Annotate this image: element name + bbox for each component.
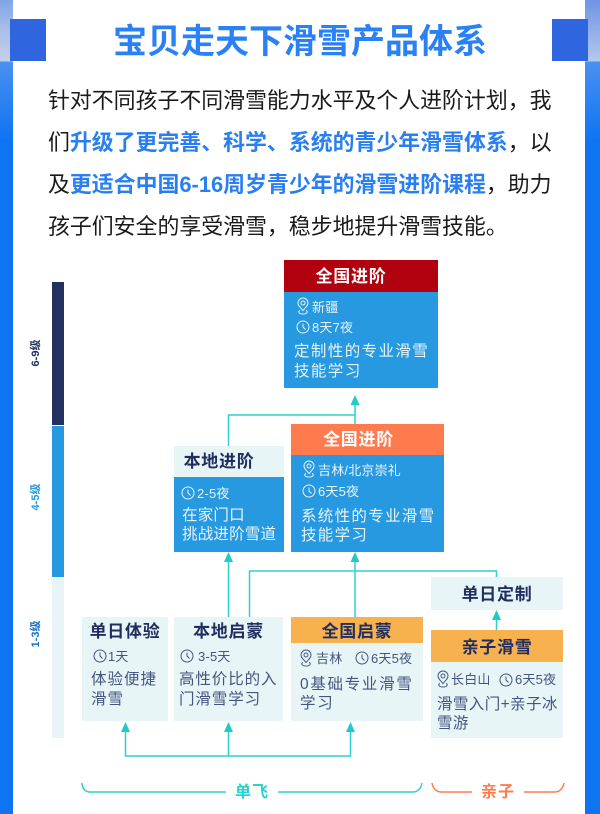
level bar: 6-9 — [52, 282, 64, 425]
description: 系统性的专业滑雪 — [301, 508, 435, 525]
description: 挑战进阶雪道 — [182, 526, 276, 543]
panel: top national advanced — [284, 260, 438, 388]
description: 门滑雪学习 — [179, 690, 261, 708]
header: 本地进阶: 本地进阶 — [184, 452, 254, 471]
header: 单日体验: 单日体验 — [90, 622, 160, 641]
duration: 3-5天 — [198, 649, 231, 664]
level label 4-5: 4-5级 — [30, 484, 42, 510]
intro text: 及更适合中国6-16周岁青少年的滑雪进阶课程，助力 — [48, 172, 552, 197]
header: 全国进阶: 全国进阶 — [316, 267, 386, 286]
level bar: 4-5 — [52, 426, 64, 577]
location: 吉林 — [316, 651, 342, 666]
panel: family ski — [431, 630, 563, 738]
level bar: 1-3 — [52, 578, 64, 738]
duration: 2-5夜 — [197, 486, 230, 501]
icon: clock — [94, 650, 106, 662]
icon: clock — [182, 486, 194, 500]
description — [294, 342, 429, 380]
icon: clock — [180, 650, 194, 662]
description — [91, 670, 157, 708]
description: 在家门口 — [182, 507, 245, 524]
header: 全国进阶 — [284, 260, 438, 292]
intro text: 针对不同孩子不同滑雪能力水平及个人进阶计划，我 — [48, 88, 552, 113]
intro text: 们升级了更完善、科学、系统的青少年滑雪体系，以 — [48, 130, 552, 155]
panel: single day custom — [431, 577, 563, 610]
description: 滑雪 — [91, 691, 124, 708]
panel: local advanced — [174, 446, 284, 552]
location: 新疆 — [312, 300, 338, 315]
duration: 6天5夜 — [515, 672, 556, 687]
title: 宝贝走天下滑雪产品体系 — [113, 23, 487, 61]
icon: clock — [302, 484, 316, 498]
header: 本地启蒙: 本地启蒙 — [193, 622, 264, 641]
level label 1-3: 1-3级 — [30, 621, 42, 647]
description: 高性价比的入 — [179, 671, 277, 688]
title ribbon left — [10, 19, 46, 61]
duration: 6天5夜 — [318, 484, 359, 499]
bracket: family — [431, 782, 565, 793]
description — [437, 696, 558, 732]
description: 体验便捷 — [91, 671, 157, 688]
icon: pin — [300, 650, 312, 666]
description — [301, 508, 435, 544]
description — [300, 676, 414, 712]
intro text: 孩子们安全的享受滑雪，稳步地提升滑雪技能。 — [48, 214, 508, 239]
header: 全国进阶: 全国进阶 — [323, 430, 394, 449]
header: 单日定制: 单日定制 — [462, 585, 532, 604]
right side band — [585, 0, 600, 814]
header: 亲子滑雪: 亲子滑雪 — [462, 638, 532, 657]
header: 本地进阶 — [174, 446, 284, 477]
intro text — [48, 88, 552, 239]
header: 亲子滑雪 — [431, 630, 563, 662]
duration: 1天 — [108, 649, 129, 664]
icon: clock — [296, 320, 310, 334]
icon: clock — [500, 674, 512, 686]
header: 全国启蒙: 全国启蒙 — [322, 622, 392, 641]
icon: pin — [438, 670, 448, 688]
description: 雪游 — [437, 715, 469, 732]
description: 学习 — [300, 695, 334, 712]
panel: single day experience — [82, 617, 168, 721]
description: 定制性的专业滑雪 — [294, 343, 429, 360]
icon: pin — [304, 460, 314, 478]
description: 滑雪入门+亲子冰 — [437, 696, 558, 713]
header: 全国启蒙 — [291, 617, 423, 643]
description: 技能学习 — [294, 363, 362, 380]
left side band — [0, 0, 13, 814]
label: 亲子: 亲子 — [481, 784, 515, 801]
description — [182, 506, 276, 543]
bracket: solo — [81, 782, 423, 793]
panel: national advanced orange — [291, 424, 444, 552]
label: 单飞: 单飞 — [235, 784, 269, 801]
duration: 8天7夜 — [312, 320, 353, 335]
header: 全国进阶 — [291, 424, 444, 455]
location: 吉林/北京崇礼 — [318, 463, 401, 478]
description: 0基础专业滑雪 — [300, 676, 414, 693]
panel: national beginner — [291, 617, 423, 721]
title ribbon right — [552, 19, 588, 61]
icon: clock — [356, 652, 368, 664]
panel: local beginner — [174, 617, 283, 721]
description: 技能学习 — [301, 527, 368, 544]
duration: 6天5夜 — [371, 651, 412, 666]
level label 6-9: 6-9级 — [30, 340, 42, 366]
location: 长白山 — [451, 672, 491, 687]
icon: pin — [298, 298, 308, 314]
description — [179, 670, 277, 708]
